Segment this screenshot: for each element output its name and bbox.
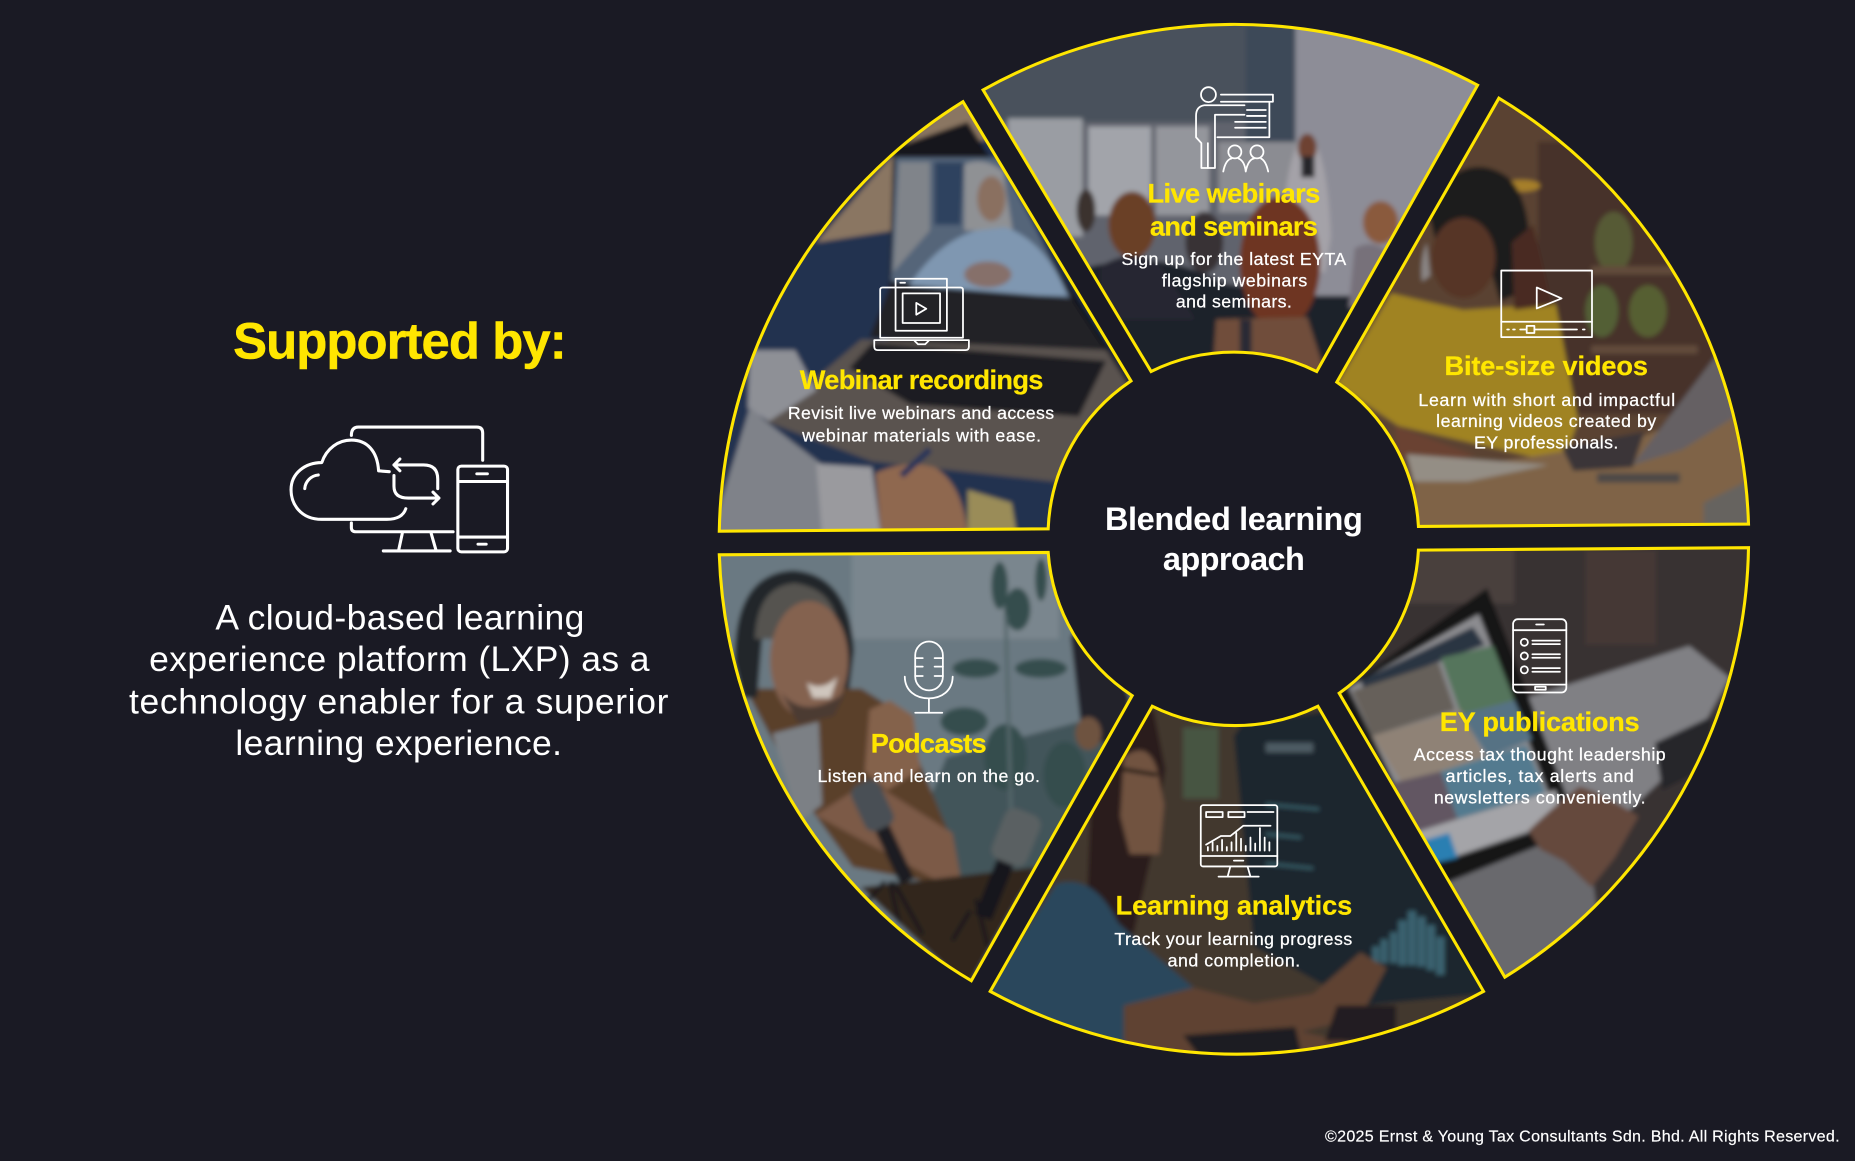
text: learning analytics description: Track your learning progress — [1114, 929, 1352, 949]
photo: seminar room — [985, 26, 1476, 370]
panel: EY publications — [1331, 538, 1757, 988]
text: live webinars description: and seminars. — [1176, 292, 1292, 312]
text: webinar recordings description: webinar materials with ease. — [801, 425, 1041, 445]
text: bite-size videos description: learning videos created by — [1436, 411, 1656, 431]
outline: podcasts segment — [719, 552, 1132, 981]
text: learning analytics description — [1114, 929, 1352, 971]
heading: live webinars: Live webinars — [1148, 177, 1320, 208]
panel: live webinars and seminars — [970, 18, 1491, 390]
panel: bite-size videos — [1325, 89, 1763, 538]
icon: analytics monitor — [1201, 805, 1277, 877]
text: EY publications description: newsletters conveniently. — [1434, 787, 1646, 807]
outline: bite-size videos segment — [1337, 98, 1749, 526]
icon: cloud and devices — [291, 427, 508, 552]
text: EY publications description: articles, tax alerts and — [1446, 766, 1634, 786]
text: LXP description: learning experience. — [235, 723, 562, 763]
icon: tablet with list — [1513, 619, 1566, 693]
outline: learning analytics segment — [990, 706, 1484, 1054]
text: podcasts description: Listen and learn on the go. — [817, 766, 1040, 786]
text: live webinars description — [1122, 249, 1346, 312]
text: LXP description: A cloud-based learning — [215, 597, 584, 637]
text: webinar recordings description: Revisit live webinars and access — [788, 403, 1054, 423]
text: LXP description — [129, 597, 669, 763]
photo: podcast host with microphones — [720, 554, 1130, 978]
panel: learning analytics — [976, 698, 1491, 1065]
text: bite-size videos description: Learn with short and impactful — [1418, 390, 1675, 410]
heading: podcasts: Podcasts — [871, 727, 987, 758]
footer: copyright: ©2025 Ernst & Young Tax Consultants Sdn. Bhd. All Rights Reserved. — [1325, 1128, 1840, 1146]
text: EY publications description — [1414, 745, 1666, 807]
heading: live webinars — [1148, 177, 1320, 241]
heading: Supported by: Supported by: — [233, 312, 567, 369]
center label: blended learning approach: Blended learning — [1105, 501, 1363, 537]
text: live webinars description: Sign up for the latest EYTA — [1122, 249, 1346, 269]
outline: webinar recordings segment — [719, 102, 1131, 531]
photo: laptop video call — [720, 104, 1129, 530]
outline: live webinars segment — [983, 24, 1478, 371]
icon: microphone — [905, 642, 953, 713]
heading: live webinars: and seminars — [1150, 210, 1318, 241]
text: learning analytics description: and completion. — [1168, 951, 1300, 971]
text: bite-size videos description: EY professionals. — [1474, 432, 1618, 452]
panel: podcasts — [710, 544, 1148, 994]
text: LXP description: experience platform (LXP) as a — [149, 639, 650, 679]
heading: webinar recordings: Webinar recordings — [800, 364, 1043, 395]
icon: presenter at board — [1196, 87, 1273, 172]
text: webinar recordings description — [788, 403, 1054, 445]
center label: blended learning approach: approach — [1163, 541, 1305, 577]
center label: blended learning approach — [1105, 501, 1363, 577]
outline: EY publications segment — [1339, 548, 1749, 977]
icon: laptop with video — [874, 279, 969, 350]
text: LXP description: technology enabler for a superior — [129, 681, 669, 721]
text: EY publications description: Access tax thought leadership — [1414, 745, 1666, 765]
photo: tablet in hand — [1343, 550, 1747, 975]
photo: analyst at monitor — [992, 708, 1481, 1052]
heading: bite-size videos: Bite-size videos — [1444, 350, 1648, 381]
text: live webinars description: flagship webinars — [1162, 270, 1307, 290]
icon: video player — [1501, 271, 1592, 337]
text: bite-size videos description — [1418, 390, 1675, 452]
panel: webinar recordings — [710, 95, 1148, 538]
heading: EY publications: EY publications — [1440, 706, 1640, 737]
heading: learning analytics: Learning analytics — [1116, 889, 1352, 920]
photo: student with headphones — [1338, 100, 1747, 525]
